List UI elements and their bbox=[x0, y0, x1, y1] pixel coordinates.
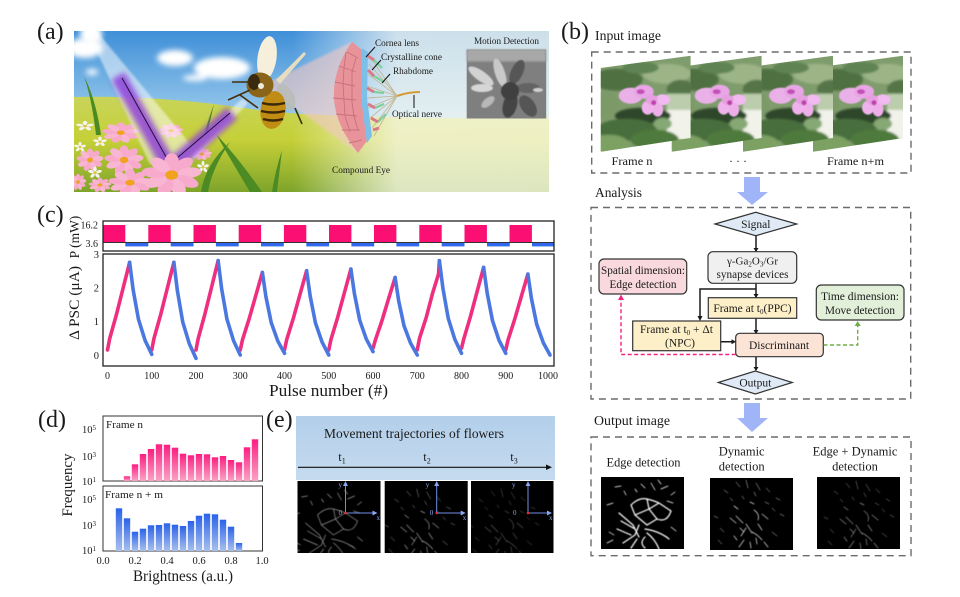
trajectory frame t1: y bbox=[338, 481, 342, 489]
frame n histogram: 5 bbox=[92, 424, 96, 432]
device box: /Gr bbox=[763, 256, 778, 268]
panel e: movement trajectories: 1 bbox=[342, 456, 346, 466]
frame n + m histogram: 5 bbox=[92, 494, 96, 502]
panel a: bee compound eye illustration bbox=[67, 23, 549, 197]
frame n + m histogram bbox=[82, 486, 262, 557]
frame n histogram bbox=[82, 416, 262, 488]
discriminant box: Discriminant bbox=[749, 340, 810, 352]
frame n image bbox=[600, 56, 691, 152]
spatial dimension box: Spatial dimension: bbox=[601, 265, 685, 277]
panel d: brightness histograms: Frequency bbox=[60, 453, 76, 516]
trajectory frame t2: 0 bbox=[430, 509, 434, 517]
y axis labels: 3 bbox=[94, 250, 99, 261]
green field bbox=[74, 97, 549, 192]
frame n histogram: 10 bbox=[82, 425, 92, 436]
time dimension box: Time dimension: bbox=[821, 291, 899, 303]
dynamic detection result bbox=[710, 444, 793, 550]
eye labels and pointers: Cornea lens bbox=[375, 39, 419, 49]
eye labels and pointers bbox=[332, 39, 442, 176]
x axis labels: 100 bbox=[144, 371, 159, 382]
dynamic detection result: Dynamic bbox=[719, 444, 765, 458]
frame NPC box: + Δt bbox=[690, 324, 714, 336]
dynamic detection result: detection bbox=[719, 460, 765, 474]
device box: 3 bbox=[760, 260, 764, 268]
heading: input image: Input image bbox=[595, 28, 661, 43]
panel d: brightness histograms: 0.4 bbox=[160, 556, 174, 567]
panel b: input frames: · · · bbox=[729, 154, 747, 168]
purple reflected light V bbox=[118, 76, 232, 168]
trajectory frame t1 bbox=[298, 481, 380, 553]
signal diamond: Signal bbox=[741, 219, 770, 231]
time arrow bbox=[298, 466, 547, 468]
panel e: movement trajectories: t bbox=[510, 450, 514, 464]
spatial dimension box: Edge detection bbox=[610, 279, 677, 291]
device box: O bbox=[752, 256, 760, 268]
light beam bbox=[88, 33, 248, 164]
frame n + m histogram: 10 bbox=[82, 546, 92, 557]
x axis labels: 300 bbox=[233, 371, 248, 382]
panel e: movement trajectories: t bbox=[338, 450, 342, 464]
panel label: (e): (e) bbox=[266, 407, 293, 433]
y axis labels: 2 bbox=[94, 284, 99, 294]
panel b: input frames bbox=[585, 52, 917, 173]
panel c: power pulse strip: 16.2 bbox=[80, 220, 98, 232]
panel b: input frames: Frame n+m bbox=[827, 154, 885, 168]
large foreground flower bbox=[142, 153, 202, 192]
arrowheads bbox=[698, 248, 758, 371]
frame image 2 bbox=[672, 56, 762, 152]
panel c: power pulse strip: P (mW) bbox=[67, 216, 82, 258]
frame n histogram: 1 bbox=[92, 476, 96, 484]
panel c: photocurrent chart bbox=[67, 250, 558, 400]
panel c: photocurrent chart: Pulse number (#) bbox=[269, 381, 388, 400]
panel d: brightness histograms: 1.0 bbox=[255, 556, 269, 567]
panel d: brightness histograms: Brightness (a.u.) bbox=[133, 568, 233, 585]
eye labels and pointers: Compound Eye bbox=[332, 166, 390, 176]
motion detection inset bbox=[466, 37, 546, 120]
frame PPC box bbox=[708, 298, 797, 318]
panel label: (a): (a) bbox=[37, 19, 64, 45]
x axis labels: 900 bbox=[498, 371, 513, 382]
pink dashed arrow to spatial dimension bbox=[618, 294, 736, 354]
sun bbox=[76, 31, 106, 44]
x axis labels: 400 bbox=[277, 371, 292, 382]
output diamond: Output bbox=[739, 378, 772, 390]
flowers bbox=[69, 121, 212, 197]
panel label: (b): (b) bbox=[561, 19, 589, 45]
device box: synapse devices bbox=[716, 269, 789, 281]
panel b: input frames: Frame n bbox=[612, 154, 652, 168]
y axis labels: 1 bbox=[94, 317, 99, 328]
frame n + m histogram: 3 bbox=[92, 520, 96, 528]
eye labels and pointers: Rhabdome bbox=[393, 67, 433, 77]
spatial dimension box bbox=[599, 259, 687, 294]
pink and blue scatter traces bbox=[108, 261, 550, 358]
frame NPC box: Frame at t bbox=[640, 324, 687, 336]
trajectory frame t3: y bbox=[512, 481, 516, 489]
overlay fade to pale background bbox=[298, 31, 549, 192]
x axis labels: 200 bbox=[188, 371, 204, 382]
trajectory frame t1: x bbox=[376, 514, 380, 522]
trajectory frame t2 bbox=[385, 481, 468, 557]
frame n histogram: 3 bbox=[92, 451, 96, 459]
panel c: power pulse strip bbox=[67, 216, 554, 258]
panel label: (c): (c) bbox=[37, 202, 64, 228]
edge plus dynamic detection result bbox=[813, 444, 900, 549]
frame n histogram: 10 bbox=[82, 452, 92, 463]
discriminant box bbox=[736, 333, 823, 357]
panel d: brightness histograms: 0.0 bbox=[96, 556, 110, 567]
edge detection result bbox=[601, 456, 684, 549]
panel label: (d): (d) bbox=[38, 407, 66, 433]
x axis labels: 1000 bbox=[538, 371, 558, 382]
y axis labels: 0 bbox=[94, 351, 99, 362]
panel e: movement trajectories bbox=[294, 416, 555, 559]
frame PPC box: (PPC) bbox=[764, 303, 792, 315]
compound eye bbox=[333, 42, 420, 153]
panel d: brightness histograms: 0.8 bbox=[224, 556, 238, 567]
signal diamond bbox=[715, 212, 797, 236]
x axis labels: 0 bbox=[105, 371, 110, 382]
heading: output image: Output image bbox=[594, 413, 670, 428]
x axis labels: 800 bbox=[454, 371, 469, 382]
motion detection inset: Motion Detection bbox=[474, 37, 539, 47]
x axis labels: 600 bbox=[366, 371, 380, 382]
frame image 3 bbox=[743, 56, 833, 152]
frame n + m histogram: 1 bbox=[92, 545, 96, 553]
panel d: brightness histograms: 0.2 bbox=[128, 556, 142, 567]
eye labels and pointers: Crystalline cone bbox=[381, 53, 442, 63]
frame n + m histogram: 10 bbox=[82, 495, 92, 506]
trajectory frame t3: x bbox=[549, 514, 553, 522]
panel e: movement trajectories: Movement trajectories of flowers bbox=[324, 426, 504, 441]
trajectory frame t3 bbox=[469, 481, 554, 557]
x axis labels: 700 bbox=[410, 371, 425, 382]
panel c: photocurrent chart: Δ PSC (μA) bbox=[67, 266, 83, 340]
panel d: brightness histograms: 0.6 bbox=[192, 556, 206, 567]
frame NPC box: (NPC) bbox=[665, 338, 695, 350]
trajectory frame t2: y bbox=[426, 481, 430, 489]
panel e: movement trajectories: t bbox=[423, 450, 427, 464]
edge detection result: Edge detection bbox=[606, 456, 681, 470]
frame PPC box: Frame at t bbox=[713, 303, 760, 315]
panel b: analysis flowchart bbox=[591, 208, 911, 399]
panel e: movement trajectories: 3 bbox=[514, 456, 518, 466]
arrow: input to analysis bbox=[737, 177, 768, 205]
panel c: power pulse strip: 3.6 bbox=[86, 239, 98, 250]
device box: γ-Ga bbox=[727, 256, 748, 268]
x axis labels: 500 bbox=[321, 371, 336, 382]
connector arrows bbox=[700, 236, 756, 370]
trajectory frame t2: x bbox=[463, 514, 467, 522]
edge plus dynamic detection result: detection bbox=[832, 460, 879, 474]
trajectory frame t1: 0 bbox=[338, 509, 342, 517]
x axis labels bbox=[105, 371, 558, 382]
grass blades bbox=[84, 76, 282, 192]
frame NPC box: 0 bbox=[687, 329, 691, 337]
magnification cone bbox=[272, 42, 357, 152]
frame PPC box: 0 bbox=[760, 308, 764, 316]
frame n + m histogram: 10 bbox=[82, 521, 92, 532]
trajectory frame t3: 0 bbox=[513, 509, 517, 517]
clouds bbox=[67, 38, 250, 81]
eye labels and pointers: Optical nerve bbox=[392, 110, 442, 120]
green dashed arrow to time dimension bbox=[824, 321, 861, 345]
panel e: movement trajectories: 2 bbox=[427, 456, 431, 466]
frame n histogram: 10 bbox=[82, 477, 92, 488]
frame n histogram: Frame n bbox=[106, 420, 144, 431]
heading: analysis: Analysis bbox=[595, 185, 642, 200]
arrow: analysis to output bbox=[737, 403, 768, 432]
y axis labels bbox=[94, 250, 99, 362]
bee bbox=[228, 35, 306, 131]
time dimension box: Move detection bbox=[825, 305, 895, 317]
panel b: output images bbox=[591, 437, 911, 556]
frame n + m histogram: Frame n + m bbox=[105, 490, 163, 501]
edge plus dynamic detection result: Edge + Dynamic bbox=[813, 444, 898, 458]
panel d: brightness histograms bbox=[60, 416, 269, 585]
sky bbox=[74, 31, 549, 118]
device box: 2 bbox=[748, 260, 752, 268]
frame n+m image bbox=[813, 56, 903, 152]
time dimension box bbox=[816, 285, 904, 320]
frame NPC box bbox=[633, 321, 721, 351]
device box bbox=[708, 252, 797, 283]
output diamond bbox=[718, 371, 792, 394]
